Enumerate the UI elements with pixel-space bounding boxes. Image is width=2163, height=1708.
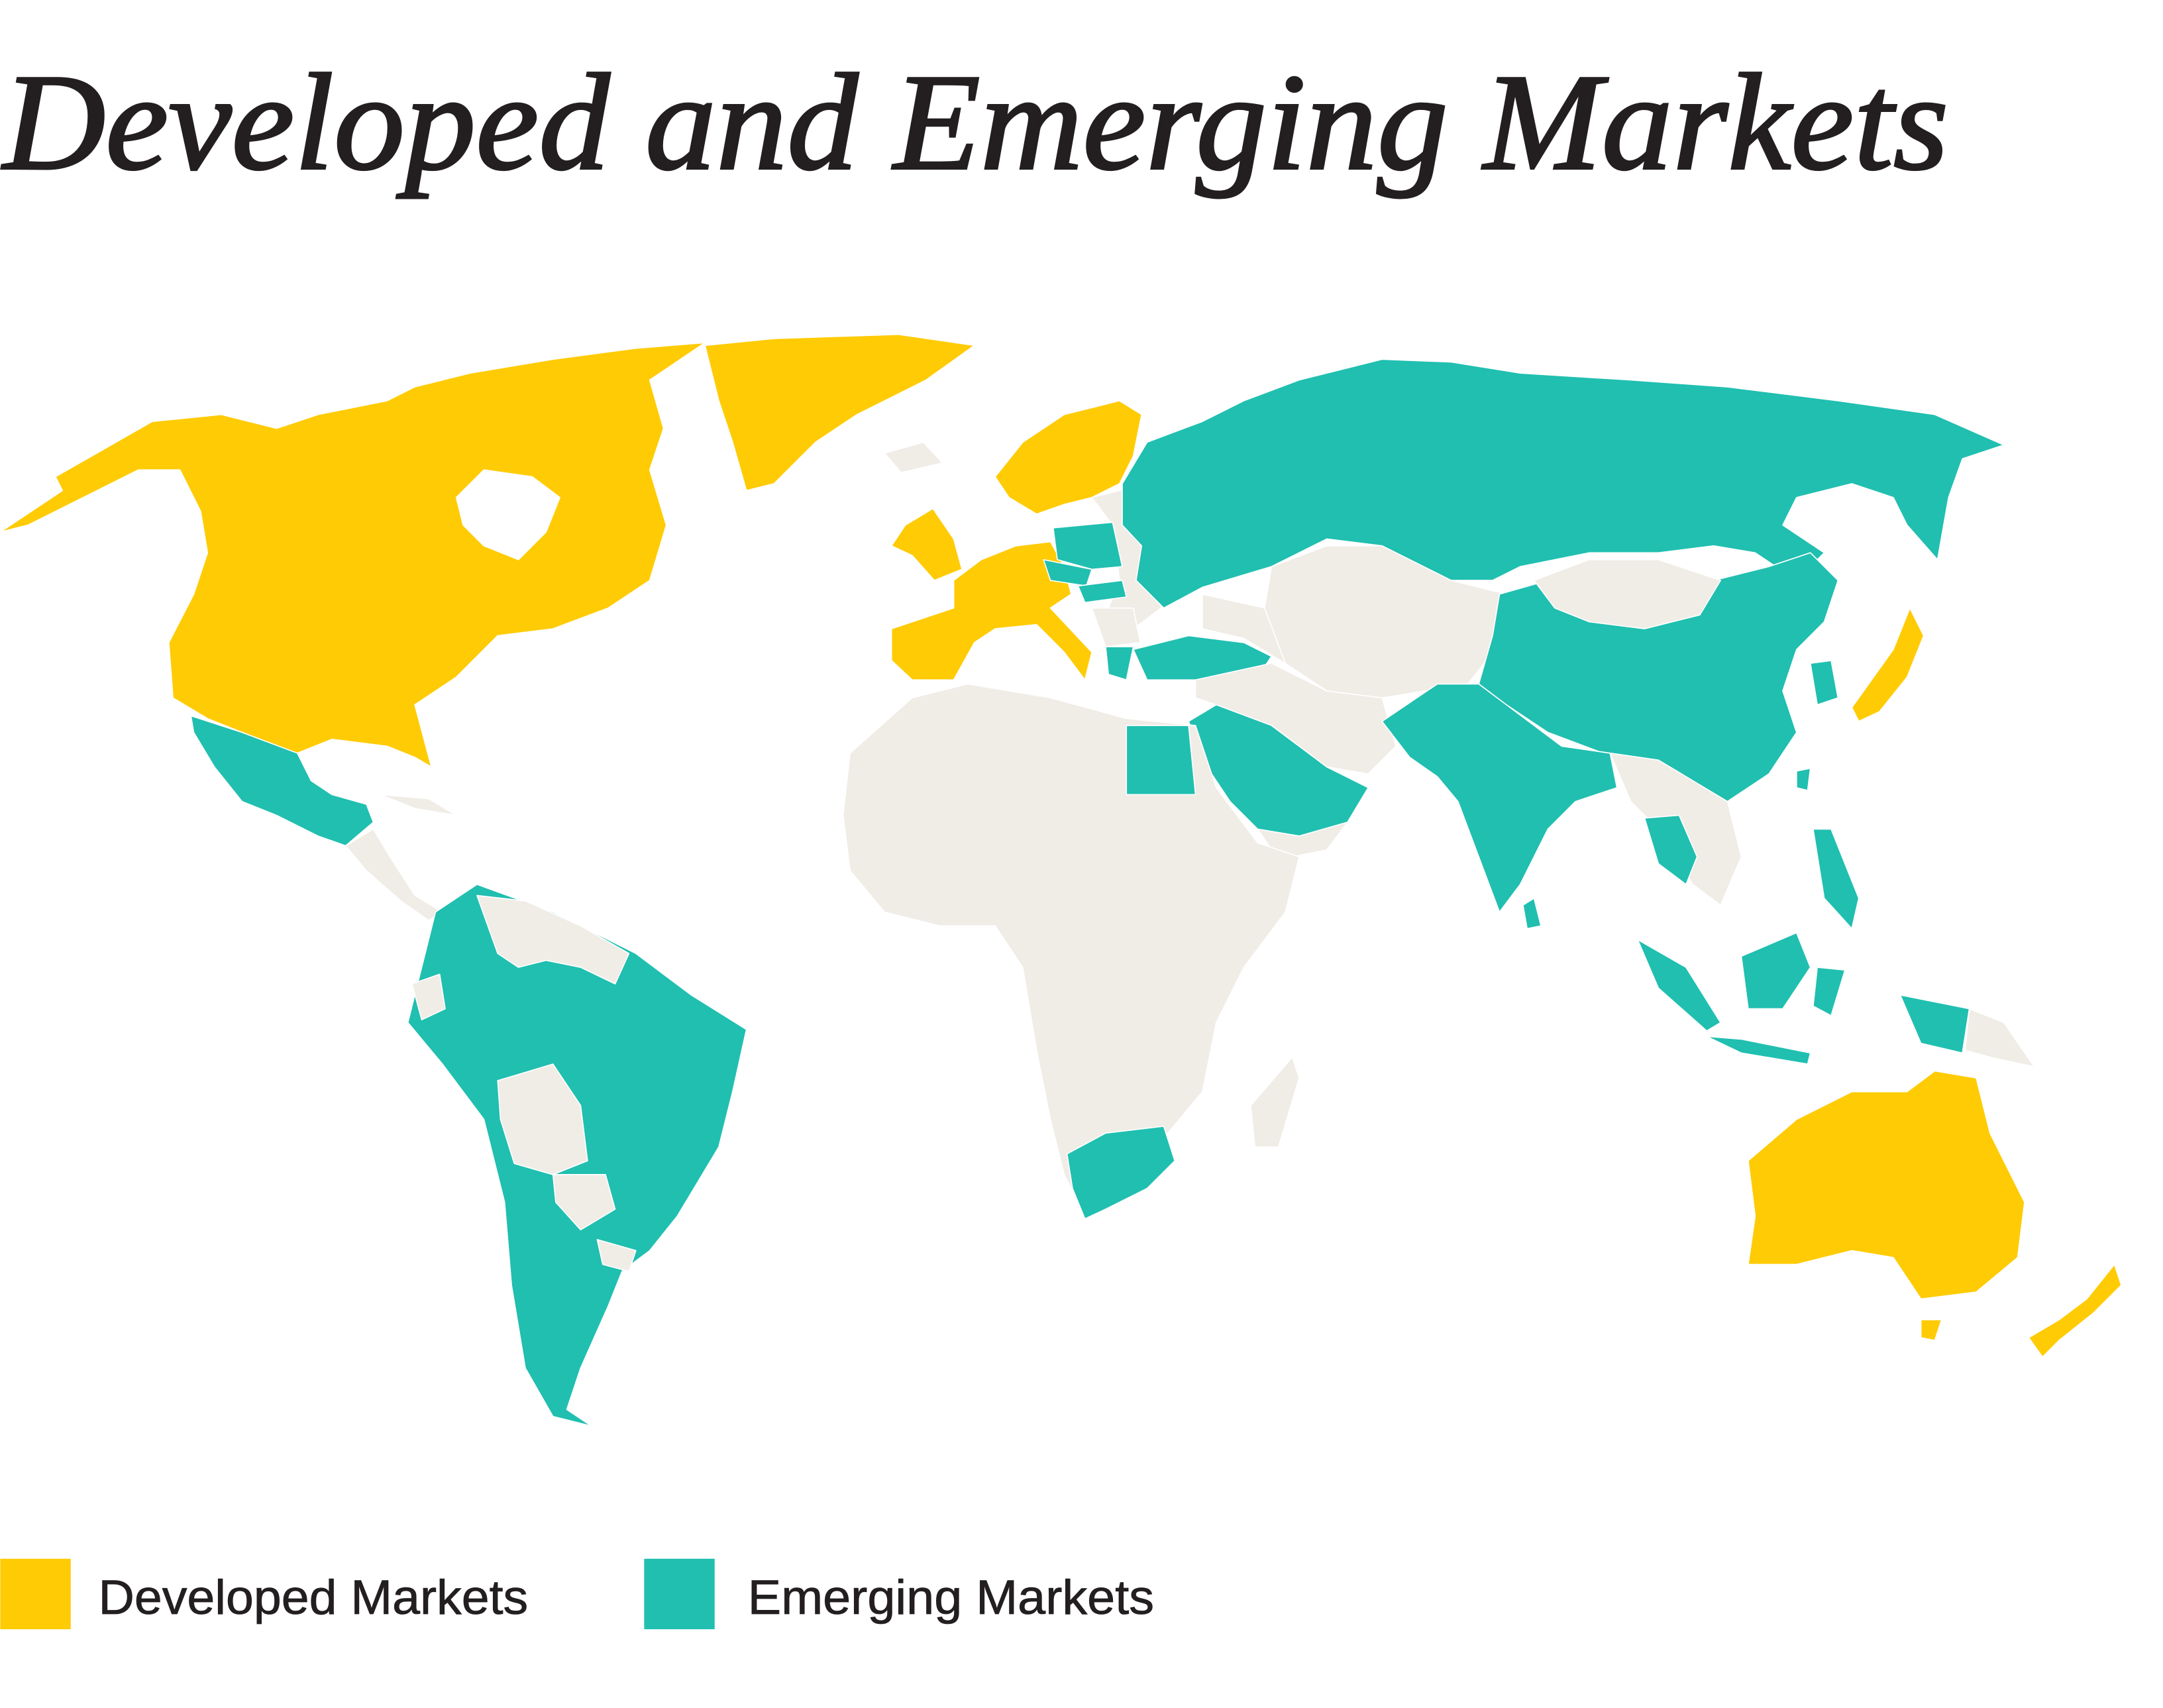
region: Latin America (191, 716, 747, 1426)
legend: emerging (644, 1559, 1154, 1629)
region: Oceania (1748, 1071, 2121, 1357)
legend: developed: Developed Markets (98, 1571, 528, 1625)
legend: developed (0, 1559, 528, 1629)
title: Developed and Emerging Markets (1, 46, 1948, 199)
region: Asia (1122, 359, 2034, 1067)
region: North America developed (0, 335, 975, 767)
region: Africa (843, 684, 1299, 1219)
region: Europe (884, 401, 1161, 680)
legend: emerging: Emerging Markets (748, 1571, 1154, 1625)
world map (0, 335, 2121, 1426)
hudson bay (456, 470, 560, 560)
